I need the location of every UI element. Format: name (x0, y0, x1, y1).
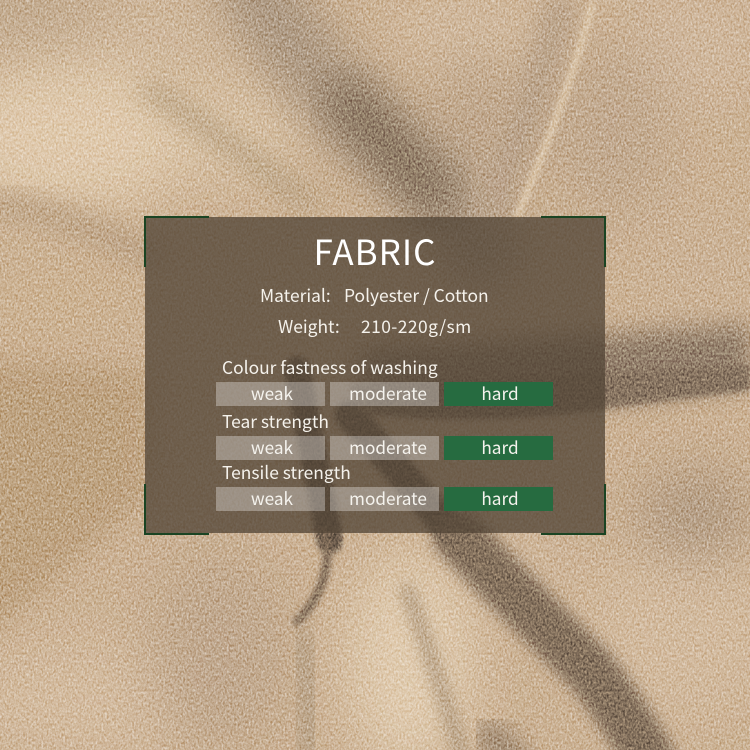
text: material: Material: (260, 283, 331, 308)
label: tear strength: Tear strength (222, 409, 329, 434)
corner bracket: top right (541, 216, 606, 267)
text: material (260, 283, 489, 308)
corner bracket: top left (144, 216, 209, 267)
label: tensile strength: Tensile strength (222, 460, 351, 485)
rating row: tear strength: weak (251, 434, 293, 459)
text: weight: 210-220g/sm (361, 314, 472, 339)
label: colour fastness of washing: Colour fastness of washing (222, 355, 438, 380)
text: material: Polyester / Cotton (344, 283, 489, 308)
corner bracket: bottom right (541, 484, 606, 535)
rating row: colour fastness: moderate (349, 380, 427, 405)
rating row: tear strength (216, 434, 553, 460)
rating row: tear strength: moderate (349, 434, 427, 459)
rating row: tensile strength: moderate (349, 485, 427, 510)
corner bracket: bottom left (144, 484, 209, 535)
dark band right of panel (360, 325, 750, 405)
lower-left tan region (0, 360, 150, 650)
rating row: colour fastness: weak (251, 380, 293, 405)
rating row: colour fastness (216, 380, 553, 406)
rating row: tensile strength (216, 485, 553, 511)
rating row: tensile strength: hard (481, 485, 519, 510)
text: weight: Weight: (278, 314, 340, 339)
text: weight (278, 314, 472, 339)
panel: fabric specification card (145, 217, 605, 533)
rating row: tear strength: hard (481, 434, 519, 459)
rating row: colour fastness: hard (481, 380, 519, 405)
title: FABRIC (314, 225, 436, 276)
rating row: tensile strength: weak (251, 485, 293, 510)
